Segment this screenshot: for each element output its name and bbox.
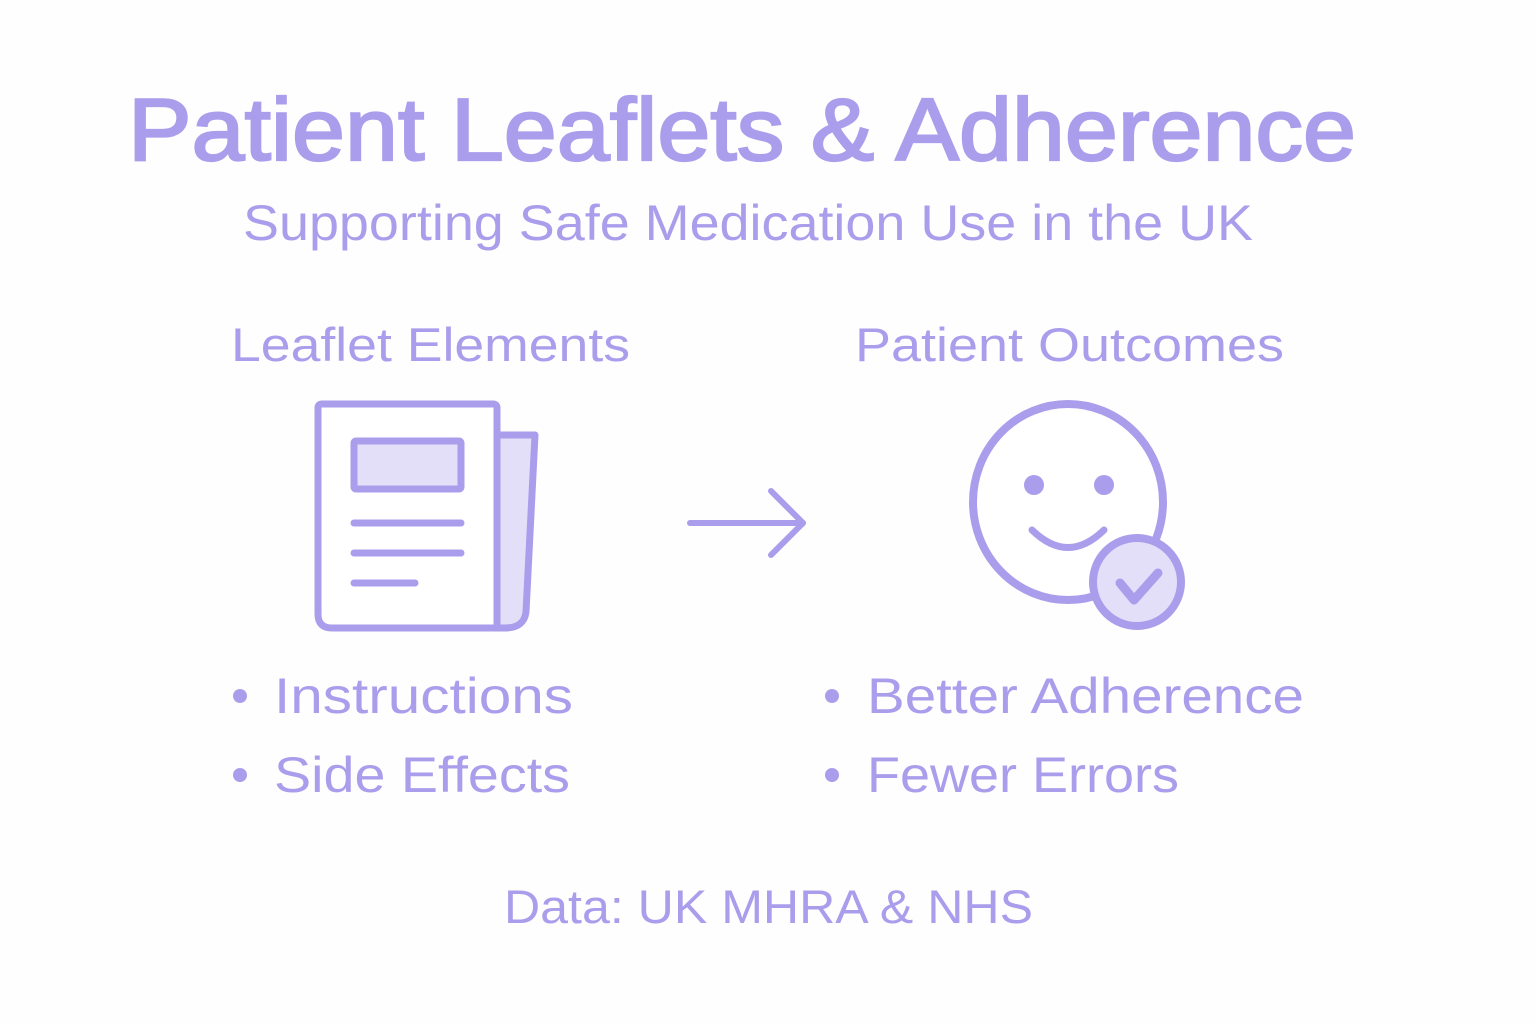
list: patient outcomes [825, 668, 1304, 803]
list: leaflet elements: Instructions [274, 668, 573, 724]
title: Patient Leaflets & Adherence [128, 80, 1356, 179]
icon: smiley with check [973, 404, 1181, 626]
heading: leaflet elements: Leaflet Elements [231, 318, 630, 371]
list: leaflet elements: Side Effects [274, 747, 570, 803]
heading: patient outcomes: Patient Outcomes [855, 318, 1284, 371]
icon: leaflet [318, 404, 535, 628]
footer source: Data: UK MHRA & NHS [504, 880, 1033, 933]
list: leaflet elements [233, 668, 573, 803]
list: patient outcomes: Better Adherence [867, 668, 1304, 724]
subtitle: Supporting Safe Medication Use in the UK [243, 195, 1253, 251]
list: patient outcomes: Fewer Errors [867, 747, 1179, 803]
arrow [690, 491, 803, 555]
